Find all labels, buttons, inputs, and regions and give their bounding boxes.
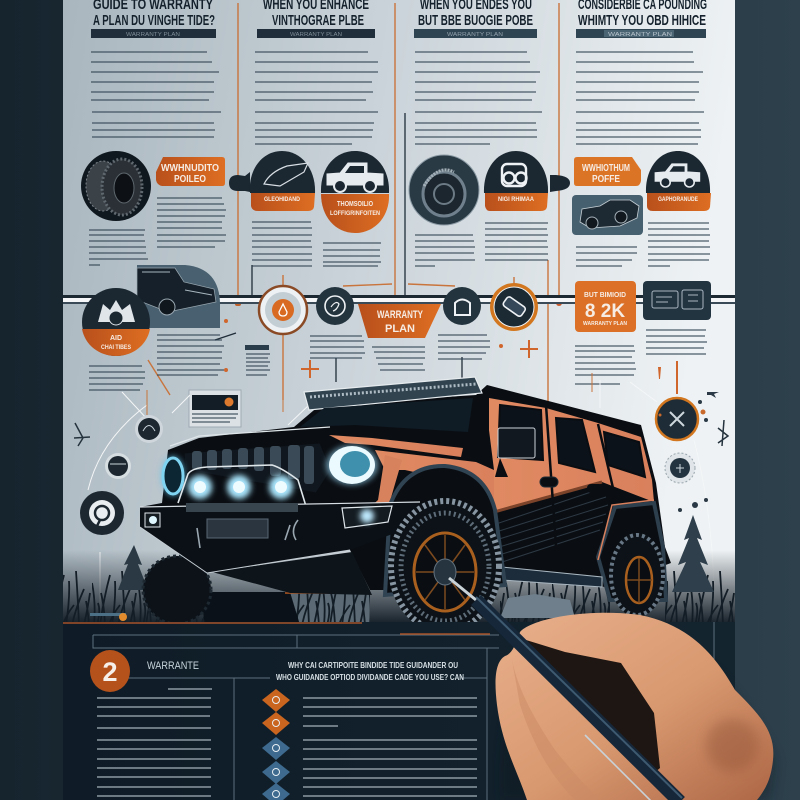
tree left (118, 545, 148, 590)
gap between thumb and fingers (526, 640, 660, 778)
door lines and handles (540, 405, 617, 560)
heading: column 3: BUT BBE BUOGIE POBE (418, 12, 533, 29)
left lower tire (143, 556, 211, 624)
stat card: 8 2K (575, 281, 636, 332)
heading: column 4: WARRANTY PLAN (608, 32, 673, 38)
grille (170, 427, 331, 493)
icon: tire circle (81, 151, 151, 221)
callout: warranty tag 1 (156, 157, 225, 186)
number badge 2: 2 (102, 657, 118, 687)
front arch (385, 466, 505, 595)
badge: car: GLEOHIDAND (264, 197, 301, 203)
banner: warranty plan (358, 304, 441, 338)
left headlight (161, 456, 185, 496)
callout: warranty tag 2: WWHIOTHUM (582, 163, 630, 174)
circle guide arcs (88, 373, 714, 625)
rear wheel (609, 533, 665, 617)
heading: column 1: WARRANTY PLAN (126, 32, 180, 38)
number badge 2 (90, 650, 130, 692)
icon: orange ring key (490, 283, 538, 331)
card: jeep image (137, 265, 220, 328)
icon: tire disc (409, 155, 479, 225)
callout: warranty tag 2: POFFE (592, 174, 620, 185)
badge: gauge: NIGI RHIMAA (498, 197, 535, 203)
badge: emblem (82, 288, 150, 356)
hand holding pen (449, 578, 775, 800)
banner: warranty plan: PLAN (385, 323, 415, 335)
badge: pickup truck (321, 151, 389, 233)
stat card: 8 2K: 8 2K (585, 301, 625, 322)
body silhouette (140, 385, 671, 590)
body orange door panel (489, 398, 654, 512)
badge: emblem: AID (110, 335, 122, 342)
heading: column 2 (257, 0, 375, 38)
decorative star left (74, 423, 90, 446)
small document block (245, 345, 270, 375)
heading: column 2: WARRANTY PLAN (290, 32, 342, 38)
icon: right callout orange ring (656, 398, 698, 440)
text blocks: below timeline (89, 330, 707, 390)
badge: gauge (484, 151, 570, 211)
right headlight (326, 445, 378, 485)
side windows (498, 405, 645, 477)
text block: column 4 body (576, 52, 704, 144)
hand shadow (499, 622, 775, 800)
section subtitle: WHO GUIDANDE OPTIOD DIVIDANDE CADE YOU USE? CAN (276, 673, 464, 682)
card: truck photo (572, 195, 643, 235)
heading: column 2: VINTHOGRAE PLBE (272, 12, 364, 29)
text block: bottom left (97, 689, 212, 796)
pen (449, 578, 682, 800)
bumper (140, 502, 420, 573)
decorative dots right (658, 392, 719, 512)
roof light bar (304, 377, 482, 410)
callout: warranty tag 1: WWHNUDITO (161, 163, 219, 174)
fog lights (188, 475, 293, 499)
orange sparkles and marks (224, 319, 678, 394)
hand (496, 613, 773, 800)
icon: ring dial (259, 286, 307, 334)
bull bar (178, 465, 320, 540)
section subtitle (276, 661, 464, 682)
tree right (672, 515, 714, 592)
fender orange sliver (338, 455, 402, 538)
icons: diamond list (262, 689, 290, 800)
stat card: 8 2K: WARRANTY PLAN (583, 321, 627, 327)
heading: column 4: WHIMTY YOU OBD HIHICE (578, 12, 706, 29)
badge: emblem: CHAI TIBES (101, 345, 131, 351)
callout icons around jeep (74, 392, 728, 535)
badge: pickup truck: LOFFIGRINFOITEN (330, 211, 380, 217)
callout: warranty tag 1: POILEO (174, 174, 206, 185)
icon: left callout top (135, 415, 163, 443)
card: warranty document (189, 390, 241, 427)
text block: column 2 body (255, 52, 378, 144)
icon: dark dial right (443, 287, 481, 325)
card: dashboard (643, 281, 711, 320)
rear arch (598, 503, 666, 600)
icon: right callout small (665, 453, 695, 483)
heading: column 1: A PLAN DU VINGHE TIDE? (93, 12, 215, 29)
timeline connectors (148, 3, 562, 420)
icon: dark dial left (316, 287, 354, 325)
windshield (300, 398, 473, 432)
heading: column 4 (576, 0, 707, 38)
callout: warranty tag 2 (574, 157, 641, 186)
badge: side truck (646, 151, 711, 211)
section title: WARRANTE (147, 660, 199, 672)
panel: bottom dark section (63, 622, 735, 800)
poster sheet (63, 0, 735, 630)
vehicle: jeep (140, 377, 671, 634)
front wheel (388, 498, 502, 634)
icon: left callout large (80, 491, 124, 535)
sill (502, 567, 602, 587)
badge: pickup truck: THOMSOILIO (337, 201, 373, 208)
heading: column 1 (91, 0, 216, 38)
icon: left callout middle (105, 453, 131, 479)
banner: warranty plan: WARRANTY (377, 309, 423, 321)
decorative star right (718, 420, 728, 446)
text block: column 1 body (91, 52, 221, 137)
stat card: 8 2K: BUT BIMIOID (584, 292, 626, 299)
rock (500, 594, 575, 618)
ground and grass (63, 515, 735, 625)
heading: column 3 (414, 0, 537, 38)
hood orange highlight (329, 435, 463, 457)
badge: car (229, 151, 315, 211)
black lower door stripes (496, 489, 608, 564)
heading: column 3: WARRANTY PLAN (447, 32, 503, 38)
badge: side truck: GAPHORANUDE (658, 197, 698, 203)
thumb shade (512, 660, 600, 800)
mirror (495, 428, 535, 477)
body orange fender (375, 450, 494, 520)
panel: column headings (91, 0, 707, 38)
knuckle shadow (706, 719, 758, 771)
text block: bottom right (303, 698, 477, 796)
section subtitle: WHY CAI CARTIPOITE BINDIDE TIDE GUIDANDER OU (288, 661, 458, 670)
under chassis (212, 552, 372, 595)
timeline band (63, 295, 735, 304)
text block: column 3 body (415, 52, 542, 144)
text blocks: sub-columns (89, 198, 710, 266)
